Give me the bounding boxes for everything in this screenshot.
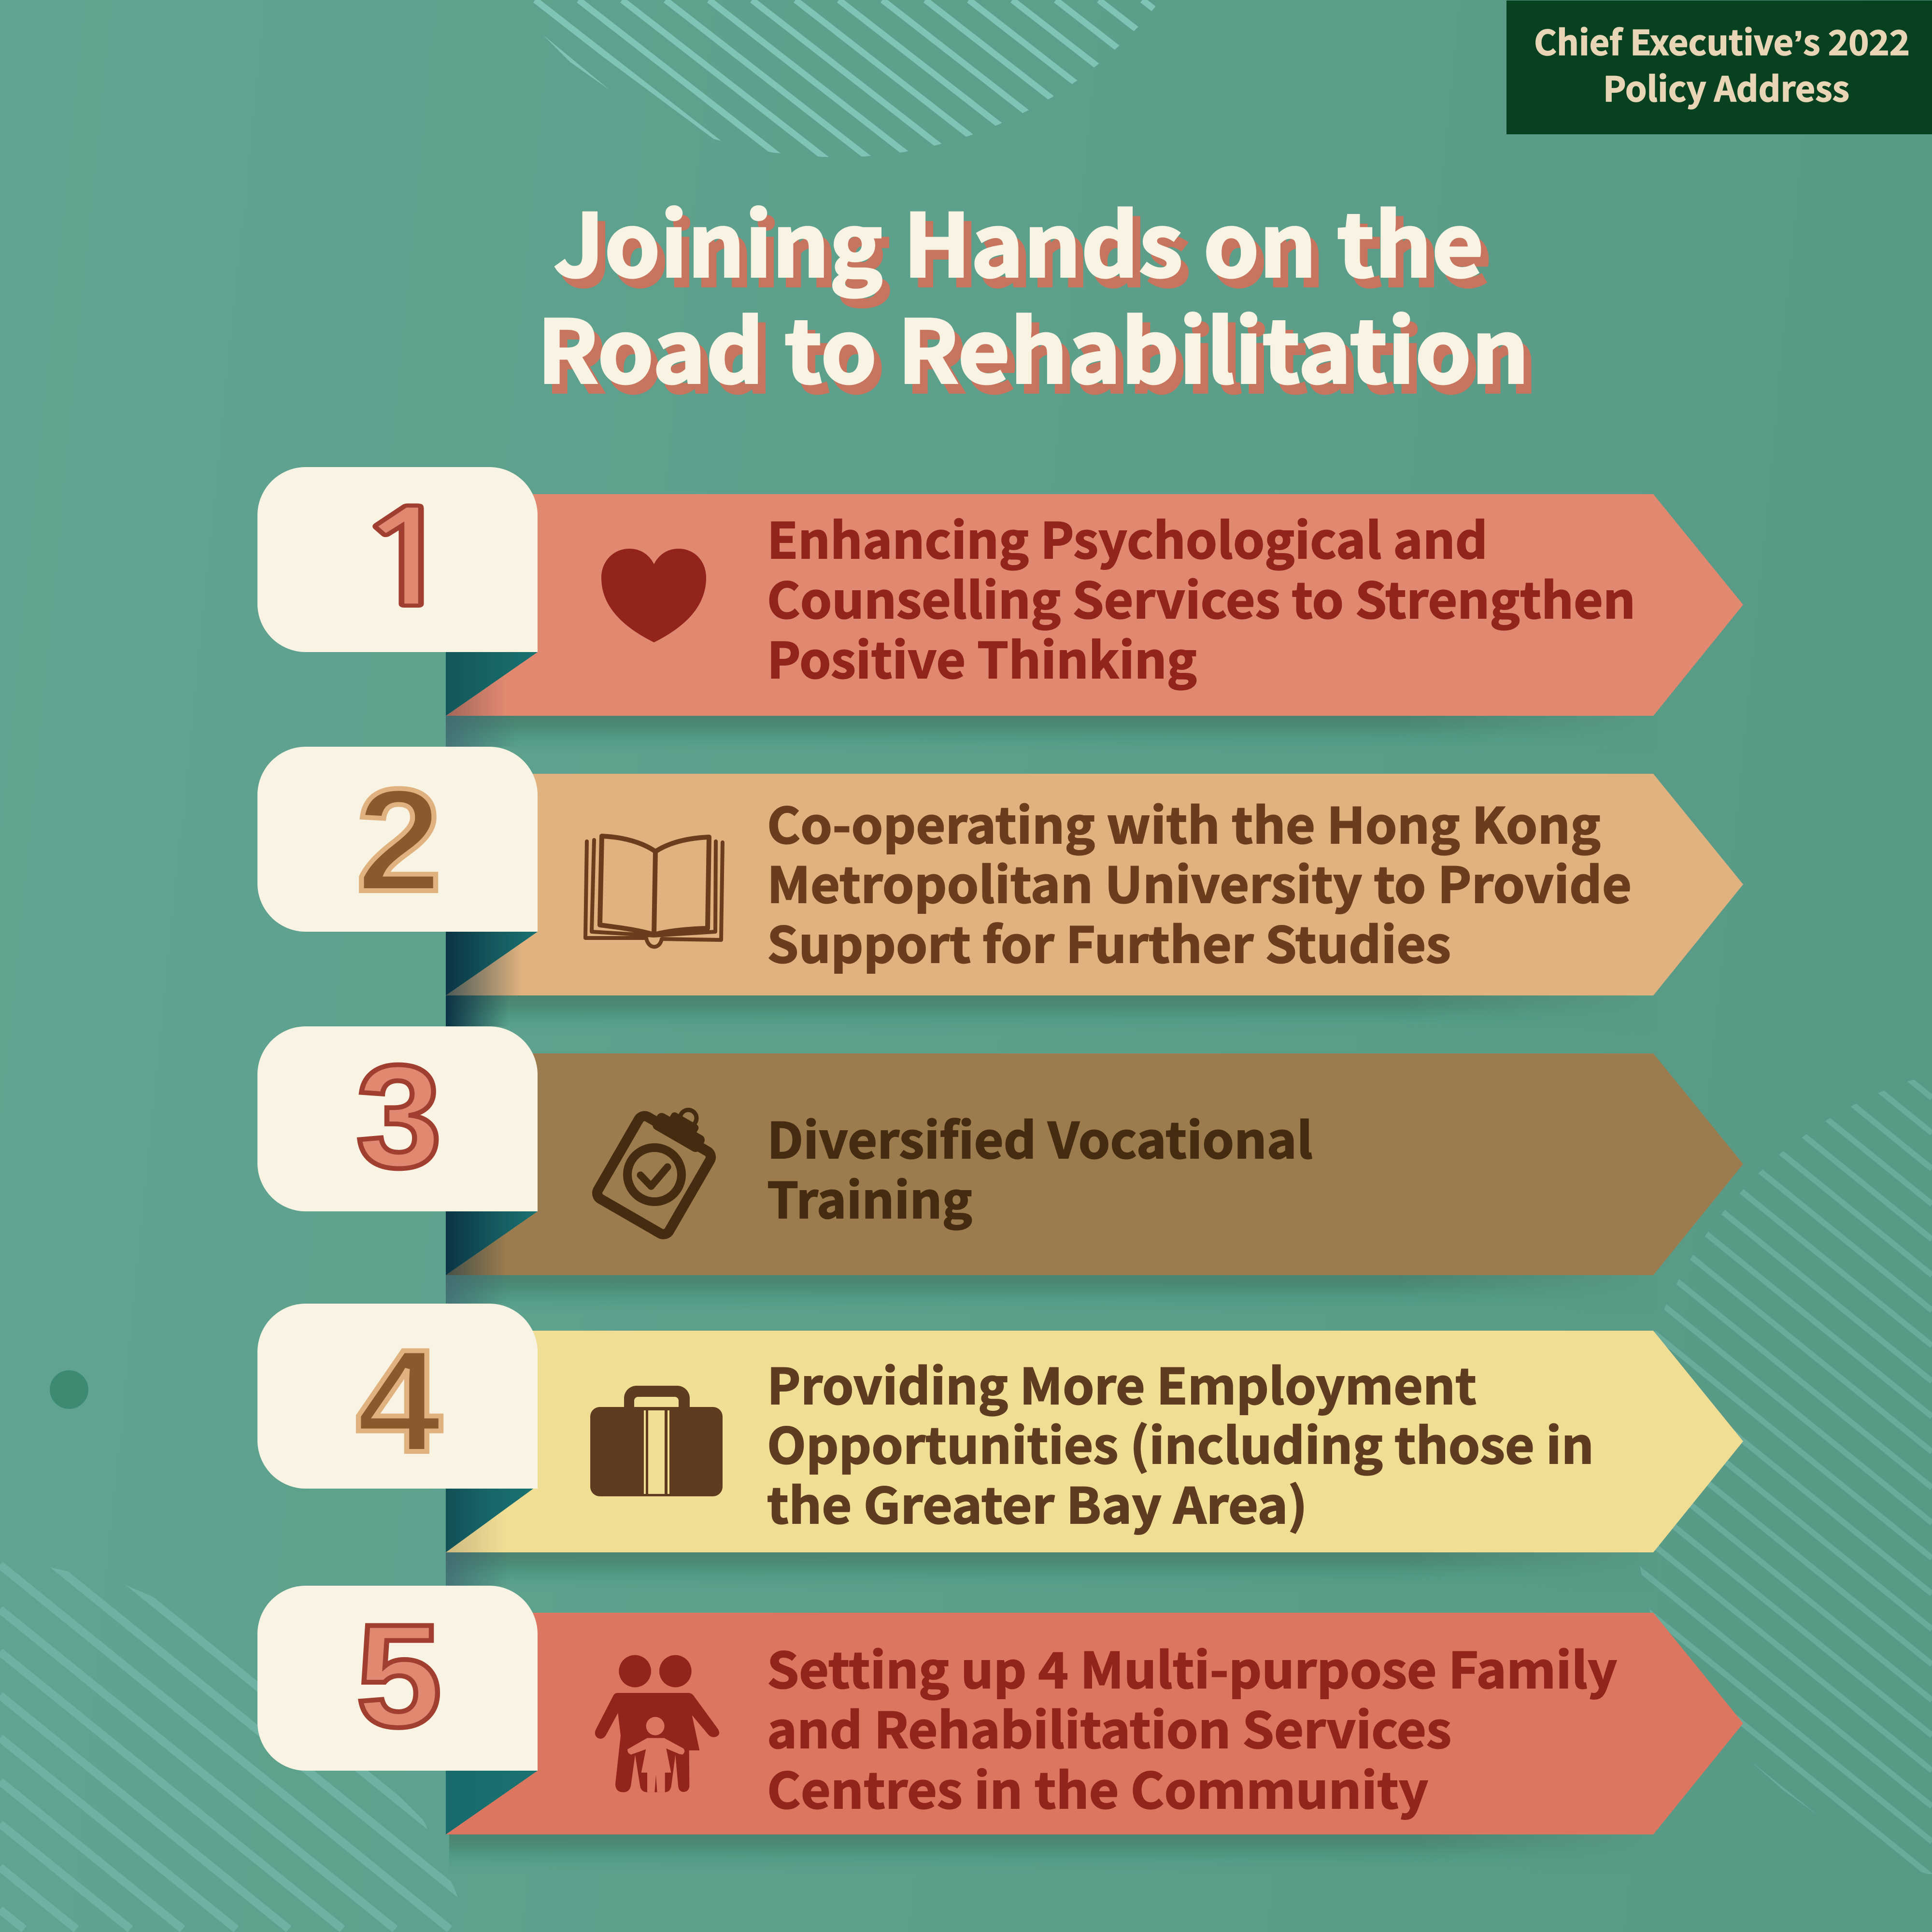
bar shadow 1 [446,716,1578,742]
row 4: more employment opportunities [257,1304,1743,1590]
decorative dot [50,1370,88,1409]
bar shadow 2 [446,995,1657,1033]
number card 5 [257,1586,538,1771]
bar shadow 5 [449,1834,1657,1872]
bar shadow 4 [446,1552,1657,1590]
left shade 3 [446,1275,509,1304]
title [537,176,1537,418]
icon: briefcase [590,1386,723,1496]
text 1: Counselling Services to Strengthen [767,562,1635,633]
text 5: Setting up 4 Multi-purpose Family [767,1632,1617,1703]
left shade 2 [446,995,509,1026]
text 5 [767,1632,1617,1823]
banner tip shade 3 [446,1211,538,1275]
number card 1 [257,467,538,652]
decorative stripes: top [533,0,1155,157]
title: Road to Rehabilitation [545,292,1537,418]
ribbon fold 1 [446,652,538,716]
number card 4 [257,1304,538,1489]
text 4: Providing More Employment [767,1348,1477,1419]
number 5: 5 [356,1593,442,1757]
number 1: 1 [352,495,462,625]
text 2 [767,787,1632,977]
row 1: psychological and counselling services [257,467,1743,753]
banner tip shade 1 [446,652,538,716]
number card 3 [257,1026,538,1211]
text 3: Diversified Vocational [767,1102,1313,1173]
title: Joining Hands on the [554,176,1484,302]
text 4: the Greater Bay Area) [767,1467,1307,1538]
ribbon fold 4 [446,1489,533,1552]
badge: Chief Executive's 2022 Policy Address: Chief Executive’s 2022 [1534,16,1910,65]
decorative stripes: bottom right [1640,1080,1932,1874]
arrow banner 2 [446,774,1743,995]
decorative stripes: bottom left [0,1562,458,1932]
text 5: Centres in the Community [767,1752,1428,1823]
text 3 [767,1102,1313,1233]
arrow banner 5 [446,1613,1743,1834]
icon: family [595,1655,719,1792]
text 4: Opportunities (including those in [767,1407,1594,1478]
arrow banner 4 [446,1331,1743,1552]
text 5: and Rehabilitation Services [767,1691,1451,1762]
text 1 [767,502,1635,693]
icon: clipboard with check [595,1098,722,1236]
text 1: Enhancing Psychological and [767,502,1488,573]
ribbon fold 5 [446,1771,538,1834]
banner tip shade 2 [446,932,538,995]
number 4: 4 [356,1319,443,1482]
badge: Chief Executive's 2022 Policy Address: Policy Address [1603,62,1849,112]
text 2: Support for Further Studies [767,906,1451,977]
title: Joining Hands on the [561,185,1492,312]
number 3: 3 [356,1034,442,1198]
icon: heart [601,549,706,642]
arrow banner 3 [446,1053,1743,1275]
text 2: Metropolitan University to Provide [767,846,1632,917]
text 3: Training [767,1162,972,1233]
left shade 1 [446,716,518,747]
row 5: multi-purpose family centres [257,1586,1743,1872]
number card 2 [257,747,538,932]
ribbon fold 3 [446,1211,538,1275]
left shade 4 [446,1552,509,1586]
arrow banner 1 [446,494,1743,716]
bar shadow 3 [446,1275,1657,1313]
icon: open book [585,836,723,947]
badge: Chief Executive's 2022 Policy Address [1506,0,1932,134]
row 3: diversified vocational training [257,1026,1743,1313]
ribbon fold 2 [446,932,538,995]
text 1: Positive Thinking [767,622,1197,693]
row 2: Hong Kong Metropolitan University [257,747,1743,1033]
text 2: Co-operating with the Hong Kong [767,787,1601,858]
banner tip shade 4 [446,1489,533,1552]
title: Road to Rehabilitation [537,282,1529,408]
number 2: 2 [356,758,442,922]
text 4 [767,1348,1594,1538]
